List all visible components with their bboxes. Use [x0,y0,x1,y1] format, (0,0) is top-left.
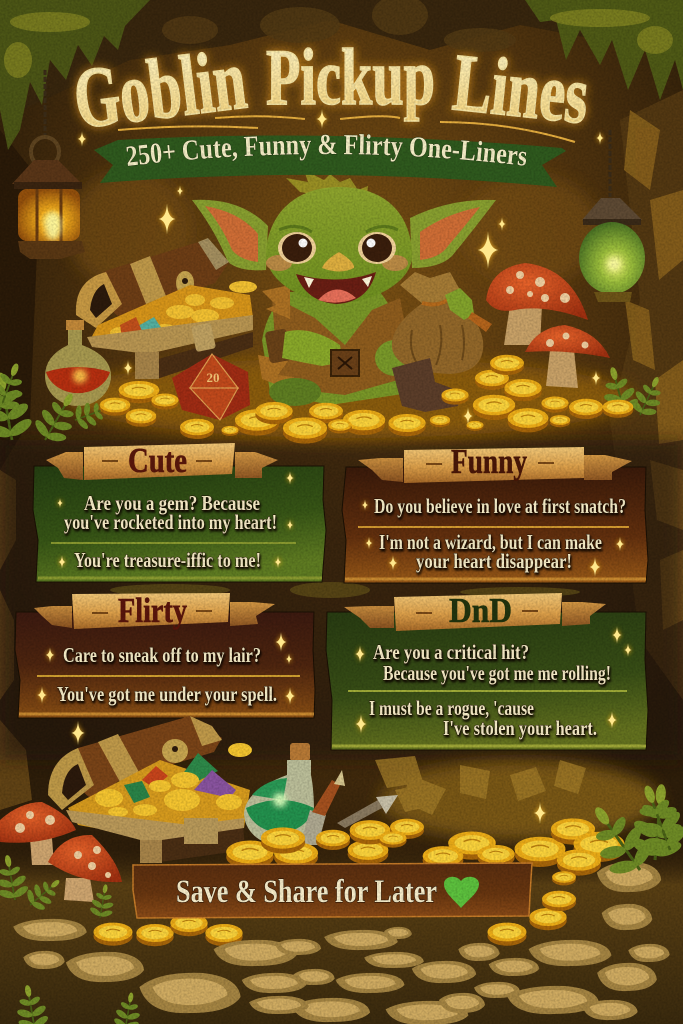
goblin boot [392,358,462,412]
panel: dnd: I've stolen your heart. [443,716,597,740]
title flourish [118,116,575,142]
moss top right [525,0,683,100]
save banner plank: Save & Share for Later [176,874,437,910]
save banner plank [133,863,532,918]
panel: flirty: Care to sneak off to my lair? [63,643,261,667]
cute header plank: Cute [128,441,187,480]
cobblestones [13,862,670,1024]
d20 die: 20 [206,370,220,385]
cute header plank [46,441,278,480]
loot sack [392,272,492,374]
funny header plank: Funny [451,442,527,481]
goblin body [258,285,416,406]
treasure chest bottom [48,716,252,863]
mushrooms top [486,263,610,388]
panel: cute [33,441,326,582]
icon: green heart [444,877,479,908]
sparkles [37,109,632,824]
panel: dnd [326,591,648,750]
panel: cute: Are you a gem? Because [84,491,260,515]
funny header plank [358,442,632,483]
panel: funny: I'm not a wizard, but I can make [379,530,602,554]
goblin head [266,170,412,304]
right lantern [579,130,645,302]
panel: dnd: Because you've got me me rolling! [383,661,611,685]
coin pile top [100,355,633,444]
panel: funny: your heart disappear! [416,549,572,573]
treasure chest top [76,238,257,379]
coin pile bottom [93,818,624,946]
title [69,31,593,147]
goblin ears [192,200,496,270]
mushrooms bottom [0,802,122,902]
dnd header plank [344,591,606,631]
panel: dnd: Are you a critical hit? [373,640,529,664]
panel: cute: You're treasure-iffic to me! [74,548,261,572]
panel: flirty [15,591,315,718]
left lantern [12,70,85,259]
daggers [300,770,398,845]
ferns top [0,358,671,450]
panel: dnd: I must be a rogue, 'cause [369,696,534,720]
moss top left [0,0,150,150]
moss shading [4,9,673,78]
ribbon banner [94,136,566,187]
panel: funny [342,442,648,583]
title: Lines [449,36,593,141]
panel: flirty: You've got me under your spell. [57,682,277,706]
potion top [45,320,111,406]
d20 die [172,354,250,420]
dnd header plank: DnD [449,591,512,630]
title: Goblin [69,31,251,147]
golden rubble [65,358,635,438]
potion bottom [244,743,314,845]
panel: cute: you've rocketed into my heart! [64,510,277,534]
flirty header plank [34,591,275,630]
title: Pickup [266,34,435,122]
subtitle: 250+ Cute, Funny & Flirty One-Liners [126,134,526,166]
flirty header plank: Flirty [118,591,187,630]
ferns bottom [0,777,683,1024]
